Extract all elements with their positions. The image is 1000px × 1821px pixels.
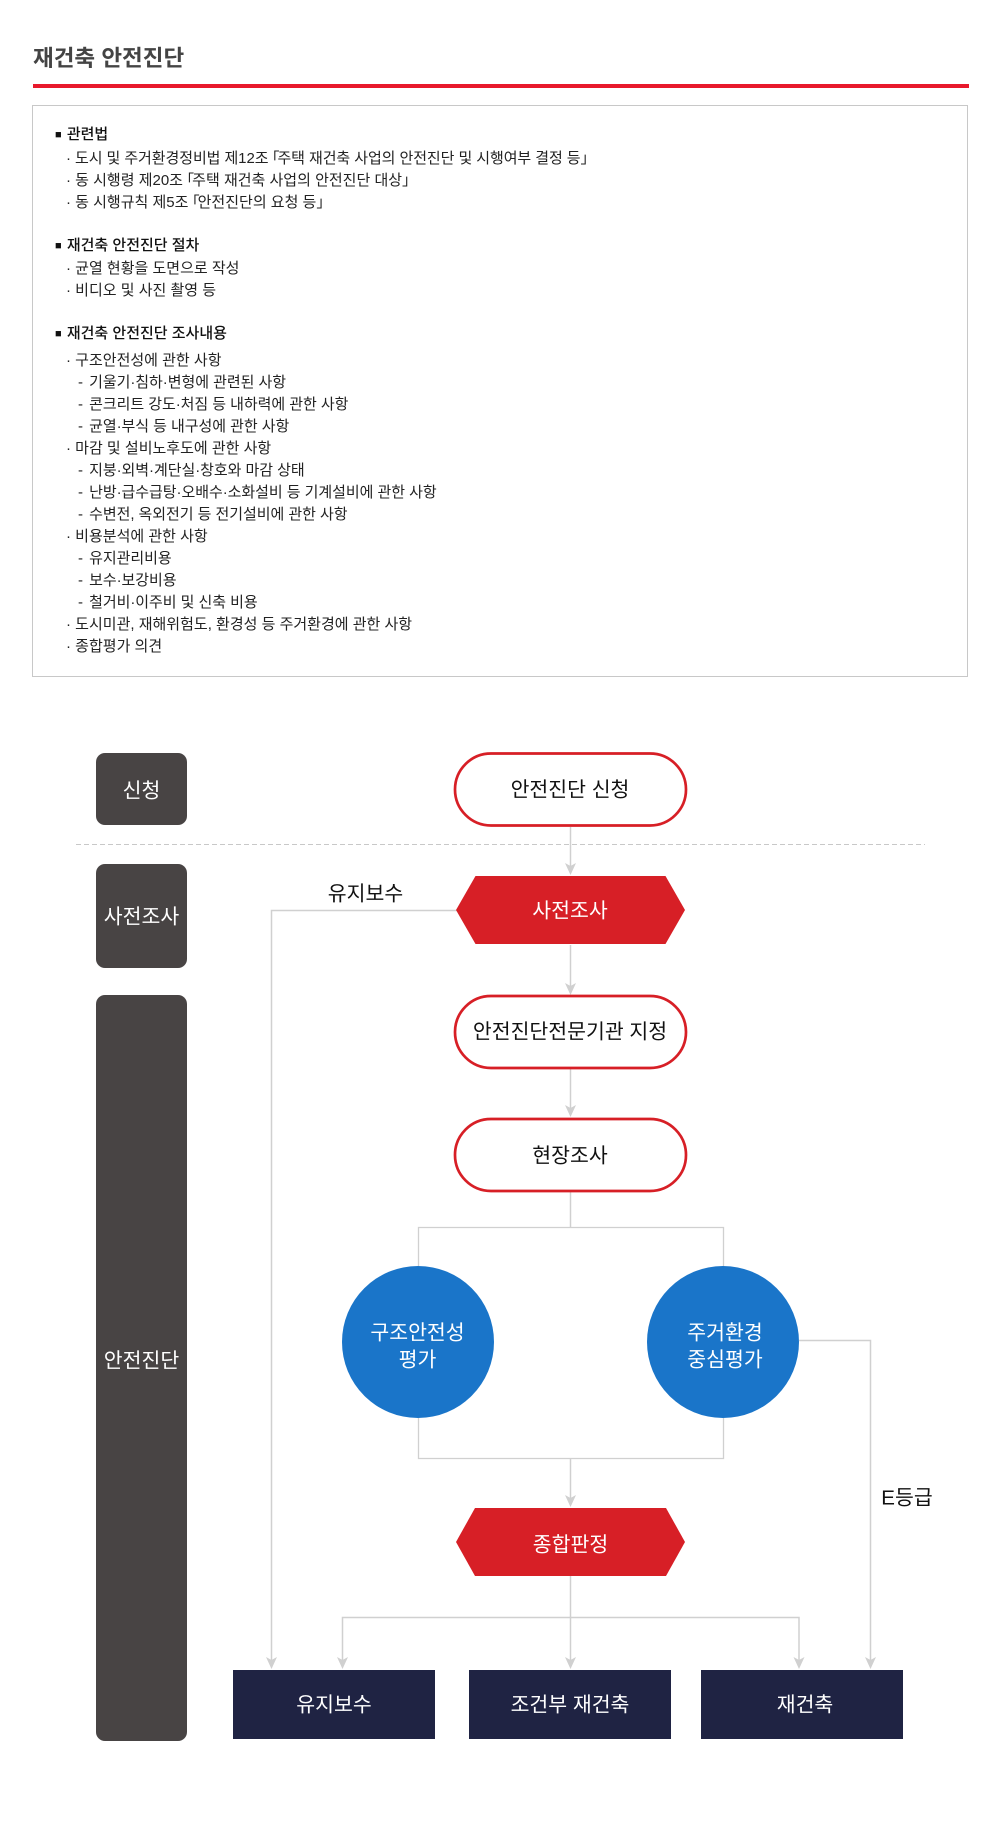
circle: residential environment evaluation: 주거환경 — [687, 1322, 763, 1344]
text: cost analysis: · 비용분석에 관한 사항 — [66, 528, 208, 545]
circle: structural safety evaluation — [342, 1266, 494, 1418]
outcome: reconstruction: 재건축 — [777, 1694, 833, 1716]
label: maintenance branch: 유지보수 — [328, 882, 403, 906]
connector: overall judgment to outcomes — [337, 1576, 804, 1669]
circle: residential environment evaluation — [647, 1266, 799, 1418]
connector: evaluations to overall judgment — [418, 1418, 724, 1507]
arrow: preliminary survey to agency designation — [565, 945, 576, 995]
arrow: preliminary survey to maintenance — [266, 910, 457, 1669]
step: diagnosis application: 안전진단 신청 — [511, 778, 629, 802]
text: finish item 1: - 지붕·외벽·계단실·창호와 마감 상태 — [78, 462, 305, 479]
step: site survey: 현장조사 — [532, 1144, 608, 1168]
heading: survey contents: ■ 재건축 안전진단 조사내용 — [55, 325, 227, 342]
stage label: safety diagnosis — [96, 995, 187, 1741]
title rule — [33, 84, 969, 88]
step: preliminary survey — [456, 876, 685, 944]
text: finish item 3: - 수변전, 옥외전기 등 전기설비에 관한 사항 — [78, 506, 348, 523]
stage label: preliminary survey — [96, 864, 187, 968]
panel: legal basis, procedure and survey contents — [32, 105, 968, 677]
text: cost item 2: - 보수·보강비용 — [78, 572, 177, 589]
stage label: preliminary survey: 사전조사 — [104, 906, 179, 928]
step: site survey — [455, 1119, 686, 1191]
text: structural safety: · 구조안전성에 관한 사항 — [66, 352, 222, 369]
text: structural item 2: - 콘크리트 강도·처짐 등 내하력에 관한 사항 — [78, 396, 348, 413]
arrow: application to preliminary survey — [565, 827, 576, 875]
outcome: reconstruction — [701, 1670, 903, 1739]
text: overall opinion: · 종합평가 의견 — [66, 638, 162, 655]
step: agency designation — [455, 996, 686, 1068]
text: law 2: · 동 시행령 제20조 「주택 재건축 사업의 안전진단 대상」 — [66, 172, 417, 189]
stage label: safety diagnosis: 안전진단 — [104, 1350, 179, 1372]
step: overall judgment — [456, 1508, 685, 1576]
text: procedure 1: · 균열 현황을 도면으로 작성 — [66, 260, 239, 277]
step: agency designation: 안전진단전문기관 지정 — [473, 1020, 667, 1044]
circle: residential environment evaluation: 중심평가 — [687, 1348, 763, 1372]
text: finish and equipment: · 마감 및 설비노후도에 관한 사항 — [66, 440, 271, 457]
step: overall judgment: 종합판정 — [533, 1534, 608, 1556]
outcome: conditional reconstruction: 조건부 재건축 — [511, 1694, 629, 1716]
text: law 1: · 도시 및 주거환경정비법 제12조 「주택 재건축 사업의 안전진단 및 시행여부 결정 등」 — [66, 150, 595, 167]
stage label: application: 신청 — [123, 780, 160, 802]
text: law 3: · 동 시행규칙 제5조 「안전진단의 요청 등」 — [66, 194, 331, 211]
arrow: agency designation to site survey — [565, 1069, 576, 1117]
stage label: application — [96, 753, 187, 825]
text: procedure 2: · 비디오 및 사진 촬영 등 — [66, 282, 216, 299]
label: E grade: E등급 — [881, 1486, 933, 1510]
outcome: maintenance: 유지보수 — [296, 1694, 372, 1716]
text: residential environment: · 도시미관, 재해위험도, 환경성 등 주거환경에 관한 사항 — [66, 616, 412, 633]
text: finish item 2: - 난방·급수급탕·오배수·소화설비 등 기계설비에 관한 사항 — [78, 484, 437, 501]
text: structural item 1: - 기울기·침하·변형에 관련된 사항 — [78, 374, 286, 391]
text: cost item 1: - 유지관리비용 — [78, 550, 172, 567]
circle: structural safety evaluation: 구조안전성 — [370, 1322, 465, 1344]
heading: procedure: ■ 재건축 안전진단 절차 — [55, 237, 199, 254]
outcome: conditional reconstruction — [469, 1670, 671, 1739]
text: structural item 3: - 균열·부식 등 내구성에 관한 사항 — [78, 418, 289, 435]
step: preliminary survey: 사전조사 — [532, 900, 608, 922]
text: cost item 3: - 철거비·이주비 및 신축 비용 — [78, 594, 258, 611]
step: diagnosis application — [455, 754, 686, 826]
outcome: maintenance — [233, 1670, 435, 1739]
circle: structural safety evaluation: 평가 — [399, 1348, 436, 1372]
title: 재건축 안전진단 — [33, 46, 184, 71]
arrow: E grade to reconstruction — [799, 1340, 876, 1669]
connector: site survey to evaluations — [418, 1192, 724, 1266]
heading: related law: ■ 관련법 — [55, 126, 108, 143]
